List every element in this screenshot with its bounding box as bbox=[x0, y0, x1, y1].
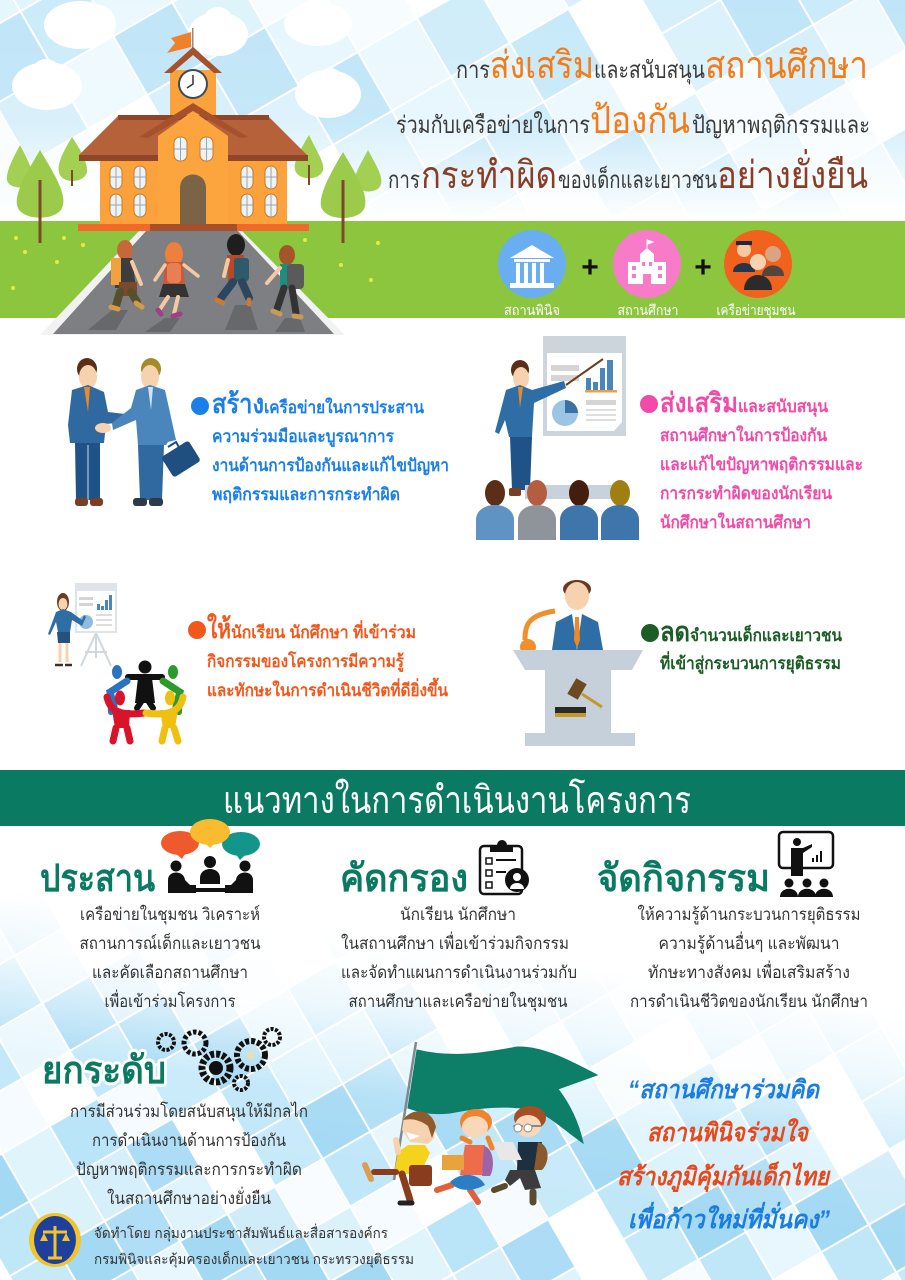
section banner bbox=[0, 770, 905, 826]
flag bbox=[167, 28, 194, 53]
illustration: speaker at podium bbox=[513, 580, 643, 746]
lawn flowers bbox=[11, 236, 380, 290]
student 3 bbox=[217, 234, 249, 304]
heading: จัดกิจกรรม bbox=[597, 858, 770, 900]
green flag bbox=[408, 1047, 597, 1143]
clock tower bbox=[164, 47, 222, 120]
description: การดำเนินงานด้านการป้องกัน bbox=[92, 1131, 286, 1150]
quote: “สถานศึกษาร่วมคิด bbox=[628, 1076, 821, 1104]
child 3 bbox=[493, 1106, 548, 1202]
presentation board bbox=[543, 336, 626, 436]
audience bbox=[476, 480, 639, 540]
plus: + bbox=[694, 251, 712, 284]
icon: justice institution bbox=[498, 230, 566, 298]
title line 1: ส่งเสริม bbox=[490, 45, 594, 87]
title line 3 bbox=[388, 149, 868, 197]
title line 3: การ bbox=[388, 167, 420, 194]
title line 1: การ bbox=[456, 57, 490, 84]
illustration: presenter bbox=[476, 336, 639, 540]
heading: ยกระดับ bbox=[42, 1050, 166, 1092]
description: ในสถานศึกษาอย่างยั่งยืน bbox=[107, 1186, 271, 1208]
text: promote: การกระทำผิดของนักเรียน bbox=[660, 483, 832, 503]
title line 3: กระทำผิด bbox=[421, 155, 557, 197]
text: give students: กิจกรรมของโครงการมีความรู้ bbox=[207, 651, 405, 673]
text: build network: พฤติกรรมและการกระทำผิด bbox=[212, 485, 400, 504]
text: give students: นักเรียน นักศึกษา ที่เข้าร่วม bbox=[231, 620, 416, 642]
icon: meeting bbox=[161, 819, 260, 893]
column: screen bbox=[340, 840, 577, 1012]
lower background pattern bbox=[0, 880, 905, 1280]
description: ให้ความรู้ด้านกระบวนการยุติธรรม bbox=[638, 904, 860, 925]
child 2 bbox=[437, 1109, 493, 1202]
text: reduce: ลด bbox=[660, 617, 690, 647]
lawn strip bbox=[0, 221, 905, 318]
text: reduce: จำนวนเด็กและเยาวชน bbox=[690, 623, 842, 645]
text: promote: และสนับสนุน bbox=[738, 397, 828, 417]
description: ปัญหาพฤติกรรมและการกระทำผิด bbox=[76, 1160, 302, 1179]
description: เพื่อเข้าร่วมโครงการ bbox=[104, 989, 236, 1011]
bullet bbox=[188, 621, 206, 639]
student 4 bbox=[267, 245, 304, 317]
description: ในสถานศึกษา เพื่อเข้าร่วมกิจกรรม bbox=[341, 931, 569, 953]
icon labels: เครือข่ายชุมชน bbox=[716, 302, 796, 319]
column: raise level bbox=[42, 1029, 308, 1208]
yellow figure bbox=[146, 690, 183, 741]
speaker bbox=[552, 580, 603, 650]
organisation logo bbox=[29, 1213, 81, 1267]
text: build network: เครือข่ายในการประสาน bbox=[264, 397, 424, 417]
windows bbox=[110, 137, 277, 217]
description bbox=[70, 1101, 308, 1208]
text: build network: สร้าง bbox=[212, 389, 264, 419]
heading: ยกระดับ bbox=[42, 1050, 166, 1092]
title line 3: อย่างยั่งยืน bbox=[717, 149, 868, 197]
text: reduce bbox=[641, 617, 842, 675]
title line 1 bbox=[456, 45, 868, 87]
title bbox=[388, 45, 870, 197]
title line 2: ปัญหาพฤติกรรมและ bbox=[692, 112, 870, 139]
icon labels bbox=[504, 302, 796, 319]
quote: สร้างภูมิคุ้มกันเด็กไทย bbox=[617, 1161, 831, 1192]
title line 2: ร่วมกับเครือข่ายในการ bbox=[396, 111, 590, 139]
main roof bbox=[79, 115, 308, 161]
student 1 bbox=[111, 240, 142, 309]
presenter man bbox=[495, 360, 566, 496]
column: activities bbox=[597, 832, 868, 1011]
door bbox=[180, 174, 206, 224]
text: promote bbox=[640, 388, 863, 532]
heading: คัดกรอง bbox=[340, 858, 468, 900]
red figure bbox=[107, 690, 144, 741]
icon: community network bbox=[724, 230, 792, 298]
credit text bbox=[94, 1224, 414, 1268]
description bbox=[341, 905, 577, 1012]
description bbox=[630, 904, 868, 1011]
base steps bbox=[78, 224, 309, 231]
title line 2 bbox=[396, 100, 870, 142]
woman bbox=[48, 593, 86, 665]
blue figure bbox=[110, 665, 127, 712]
bullet bbox=[640, 395, 658, 413]
bullet bbox=[641, 624, 659, 642]
road bbox=[40, 231, 345, 335]
icon: gears bbox=[158, 1029, 280, 1090]
briefcase bbox=[161, 440, 201, 478]
icon: school bbox=[613, 230, 681, 298]
gavel bbox=[555, 678, 602, 717]
description bbox=[80, 904, 261, 1011]
student 2 bbox=[155, 242, 198, 316]
description: ความรู้ด้านอื่นๆ และพัฒนา bbox=[658, 931, 840, 954]
clouds bbox=[12, 0, 361, 118]
plus: + bbox=[581, 251, 599, 284]
description: การดำเนินชีวิตของนักเรียน นักศึกษา bbox=[630, 992, 868, 1011]
central bay bbox=[139, 103, 248, 224]
partner icons bbox=[498, 230, 796, 319]
title line 1: และสนับสนุน bbox=[594, 57, 705, 85]
school building bbox=[78, 28, 309, 231]
text: reduce: ที่เข้าสู่กระบวนการยุติธรรม bbox=[660, 651, 841, 675]
illustration: handshake bbox=[68, 358, 201, 506]
text: promote: สถานศึกษาในการป้องกัน bbox=[660, 425, 827, 445]
podium bbox=[513, 650, 643, 746]
pointer bbox=[566, 359, 603, 385]
man left bbox=[68, 358, 125, 506]
quote: เพื่อก้าวใหม่ที่มั่นคง” bbox=[628, 1201, 830, 1234]
bullet bbox=[191, 397, 209, 415]
description: และจัดทำแผนการดำเนินงานร่วมกับ bbox=[341, 963, 577, 982]
sky background pattern bbox=[0, 0, 905, 222]
icon: trainer and audience bbox=[779, 832, 833, 897]
description: และคัดเลือกสถานศึกษา bbox=[92, 963, 248, 982]
text: give students bbox=[188, 613, 448, 700]
handshake hands bbox=[95, 423, 111, 433]
icon: clipboard bbox=[480, 840, 529, 894]
description: ทักษะทางสังคม เพื่อเสริมสร้าง bbox=[648, 960, 850, 982]
text: give students: ให้ bbox=[207, 613, 231, 644]
flag pole bbox=[394, 1042, 416, 1180]
trees bbox=[7, 135, 381, 243]
title line 2: ป้องกัน bbox=[590, 100, 690, 142]
text: build network: งานด้านการป้องกันและแก้ไขปัญหา bbox=[212, 455, 449, 476]
text: promote: นักศึกษาในสถานศึกษา bbox=[660, 512, 811, 532]
man right bbox=[112, 358, 176, 506]
credit text: กรมพินิจและคุ้มครองเด็กและเยาวชน กระทรวงยุติธรรม bbox=[94, 1250, 414, 1268]
title line 3: ของเด็กและเยาวชน bbox=[558, 165, 717, 194]
text: build network: ความร่วมมือและบูรณาการ bbox=[212, 426, 395, 448]
description: เครือข่ายในชุมชน วิเคราะห์ bbox=[80, 904, 260, 925]
heading: ประสาน bbox=[40, 858, 155, 900]
icon labels: สถานพินิจ bbox=[504, 302, 560, 318]
section banner: แนวทางในการดำเนินงานโครงการ bbox=[223, 778, 691, 822]
icon labels: สถานศึกษา bbox=[618, 302, 678, 318]
text: promote: และแก้ไขปัญหาพฤติกรรมและ bbox=[660, 454, 863, 475]
students walking bbox=[111, 234, 304, 317]
people circle bbox=[107, 660, 183, 741]
title line 1: สถานศึกษา bbox=[705, 45, 868, 87]
text: build network bbox=[191, 389, 449, 504]
black figure bbox=[128, 660, 162, 708]
description: สถานการณ์เด็กและเยาวชน bbox=[80, 932, 261, 953]
text: promote: ส่งเสริม bbox=[660, 388, 738, 418]
child 1 bbox=[365, 1111, 436, 1203]
stage bbox=[525, 485, 615, 499]
credit text: จัดทำโดย กลุ่มงานประชาสัมพันธ์และสื่อสารองค์กร bbox=[94, 1224, 388, 1242]
wings bbox=[100, 161, 287, 224]
description: นักเรียน นักศึกษา bbox=[400, 905, 516, 924]
green figure bbox=[163, 665, 180, 712]
quote: สถานพินิจร่วมใจ bbox=[647, 1118, 809, 1147]
description: สถานศึกษาและเครือข่ายในชุมชน bbox=[348, 991, 568, 1012]
description: การมีส่วนร่วมโดยสนับสนุนให้มีกลไก bbox=[70, 1101, 308, 1122]
column: coordinate bbox=[40, 819, 261, 1011]
text: give students: และทักษะในการดำเนินชีวิตที่ดียิ่งขึ้น bbox=[207, 677, 448, 700]
illustration: children with flag bbox=[365, 1042, 597, 1203]
easel board bbox=[75, 583, 117, 666]
illustration: woman presenter bbox=[48, 583, 183, 741]
quote bbox=[617, 1076, 831, 1234]
microphone bbox=[520, 611, 555, 655]
